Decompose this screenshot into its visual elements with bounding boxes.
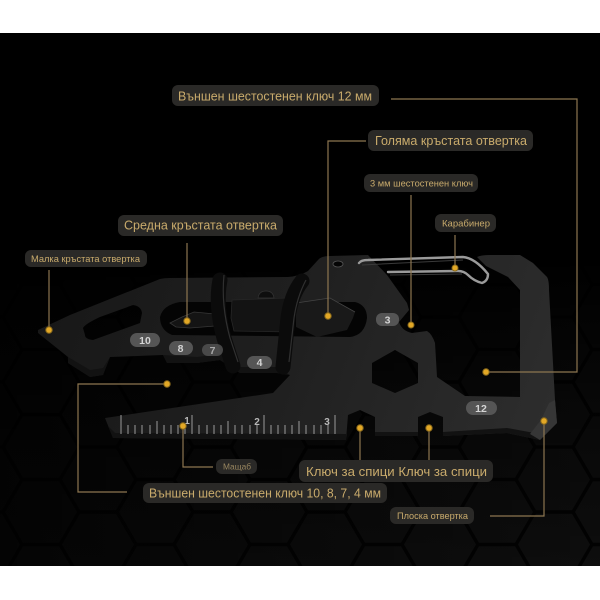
8 size badge: 8 xyxy=(178,343,184,355)
callout: small phillips screwdriver xyxy=(25,250,147,333)
callout: carabiner: Карабинер xyxy=(442,218,490,230)
callout: carabiner xyxy=(435,214,496,271)
4 size badge: 4 xyxy=(257,357,263,369)
callout: spoke wrench: Ключ за спици Ключ за спици xyxy=(306,464,487,479)
callout: scale: Мащаб xyxy=(223,462,251,472)
7 size badge: 7 xyxy=(210,345,216,357)
12 size badge: 12 xyxy=(475,403,487,415)
ruler number 2: 2 xyxy=(254,417,260,428)
8 size badge xyxy=(169,341,193,355)
right ring xyxy=(283,281,302,367)
10 size badge xyxy=(130,333,160,347)
callout: spoke wrench xyxy=(299,425,493,482)
tool body xyxy=(38,255,557,440)
ruler number 1: 1 xyxy=(184,416,190,427)
small phillips bit xyxy=(170,312,215,328)
callout: large phillips screwdriver: Голяма кръстата отвертка xyxy=(375,134,527,148)
carabiner hole xyxy=(333,261,343,267)
flat screwdriver tip xyxy=(530,400,557,440)
centre hex shaft xyxy=(231,298,290,332)
3 size badge xyxy=(376,313,399,326)
callout: large phillips screwdriver xyxy=(325,130,533,319)
7 size badge xyxy=(202,344,223,357)
10 size badge: 10 xyxy=(139,335,151,347)
callout: 3 mm hex key: 3 мм шестостенен ключ xyxy=(370,178,473,188)
12 size badge xyxy=(466,401,497,415)
callout: medium phillips screwdriver: Средна кръстата отвертка xyxy=(124,218,277,232)
callout: external hex key 12 mm xyxy=(172,85,577,375)
callout: small phillips screwdriver: Малка кръстата отвертка xyxy=(31,254,141,265)
shaft knob xyxy=(258,291,274,298)
callout: external hex key 10, 8, 7, 4 mm: Външен шестостенен ключ 10, 8, 7, 4 мм xyxy=(149,486,381,500)
callout: medium phillips screwdriver xyxy=(118,215,283,324)
central slot xyxy=(160,302,367,337)
callout: scale xyxy=(180,423,257,474)
ruler number 3: 3 xyxy=(324,417,330,428)
callout: flat screwdriver: Плоска отвертка xyxy=(397,511,469,522)
callout: external hex key 10, 8, 7, 4 mm xyxy=(78,381,387,503)
large phillips bit xyxy=(296,298,355,337)
lower bevel of tool xyxy=(68,354,557,440)
3 size badge: 3 xyxy=(385,314,391,326)
callout: external hex key 12 mm: Външен шестостенен ключ 12 мм xyxy=(178,90,372,104)
left ring xyxy=(218,280,233,366)
ruler scale xyxy=(121,415,335,434)
multitool product illustration xyxy=(38,255,557,440)
4 size badge xyxy=(247,356,272,369)
carabiner wire gate xyxy=(359,257,488,283)
callout: 3 mm hex key xyxy=(364,174,478,328)
callout: flat screwdriver xyxy=(390,418,547,524)
